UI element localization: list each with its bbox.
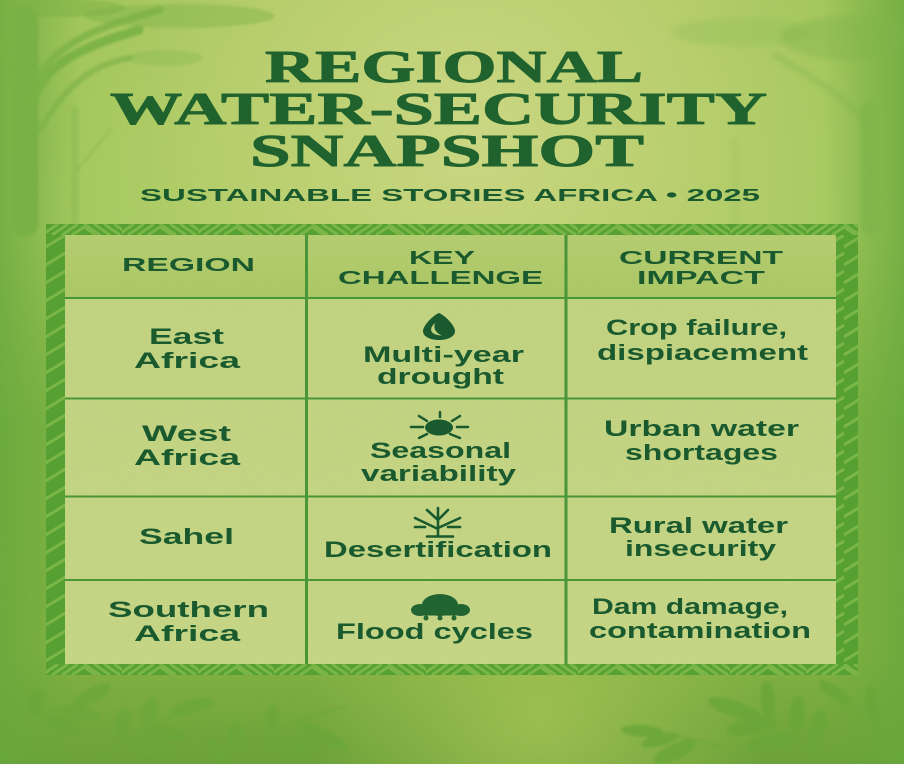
- impact: [604, 416, 800, 465]
- challenge: Multi-year: [363, 342, 525, 367]
- region name: West: [142, 421, 232, 446]
- table: [46, 224, 858, 675]
- icon: water drop: [423, 313, 455, 340]
- impact: Urban water: [604, 416, 800, 441]
- row: East Africa: [134, 313, 809, 389]
- background trees: right: [670, 16, 904, 226]
- impact: [589, 594, 811, 643]
- subtitle: SUSTAINABLE STORIES AFRICA • 2025: [140, 185, 760, 205]
- icon: sun: [411, 412, 468, 438]
- icon: flood cloud: [411, 594, 470, 620]
- row: Sahel: [139, 508, 789, 562]
- table cells: [65, 235, 836, 664]
- challenge: Desertification: [324, 537, 552, 562]
- background leaves: right: [622, 678, 883, 764]
- challenge: variability: [361, 461, 517, 486]
- title: [110, 41, 767, 176]
- impact: Rural water: [609, 513, 789, 538]
- region name: Africa: [134, 621, 241, 646]
- icon: bare tree: [415, 508, 460, 536]
- background trees: left: [0, 0, 275, 224]
- impact: [609, 513, 789, 561]
- impact: [597, 315, 809, 365]
- row: West Africa: [134, 412, 800, 486]
- header row: CHALLENGE: [338, 268, 543, 288]
- challenge: [361, 438, 517, 486]
- background leaves: left: [27, 680, 349, 764]
- table grid lines: [65, 235, 836, 664]
- challenge: drought: [377, 364, 505, 389]
- impact: dispiacement: [597, 340, 809, 365]
- header row: CURRENT: [619, 248, 783, 268]
- row: Southern Africa: [108, 594, 811, 646]
- region name: [134, 324, 241, 373]
- impact: Crop failure,: [606, 315, 787, 340]
- header row: [122, 248, 783, 288]
- challenge: Flood cycles: [336, 619, 533, 644]
- title: WATER-SECURITY: [110, 83, 767, 134]
- region name: Southern: [108, 597, 269, 622]
- region name: [108, 597, 269, 646]
- impact: shortages: [625, 440, 778, 465]
- title: REGIONAL: [265, 41, 643, 92]
- header row: IMPACT: [637, 268, 765, 288]
- impact: insecurity: [625, 536, 777, 561]
- region name: Sahel: [139, 524, 234, 549]
- impact: contamination: [589, 618, 811, 643]
- challenge: [363, 342, 525, 389]
- patterned table border: [46, 224, 858, 675]
- challenge: Seasonal: [370, 438, 511, 463]
- region name: Africa: [134, 348, 241, 373]
- title: SNAPSHOT: [250, 125, 644, 176]
- impact: Dam damage,: [592, 594, 788, 619]
- region name: Africa: [134, 445, 241, 470]
- region name: [134, 421, 241, 470]
- header row: REGION: [122, 255, 255, 275]
- header row: KEY: [409, 248, 475, 268]
- region name: East: [149, 324, 225, 349]
